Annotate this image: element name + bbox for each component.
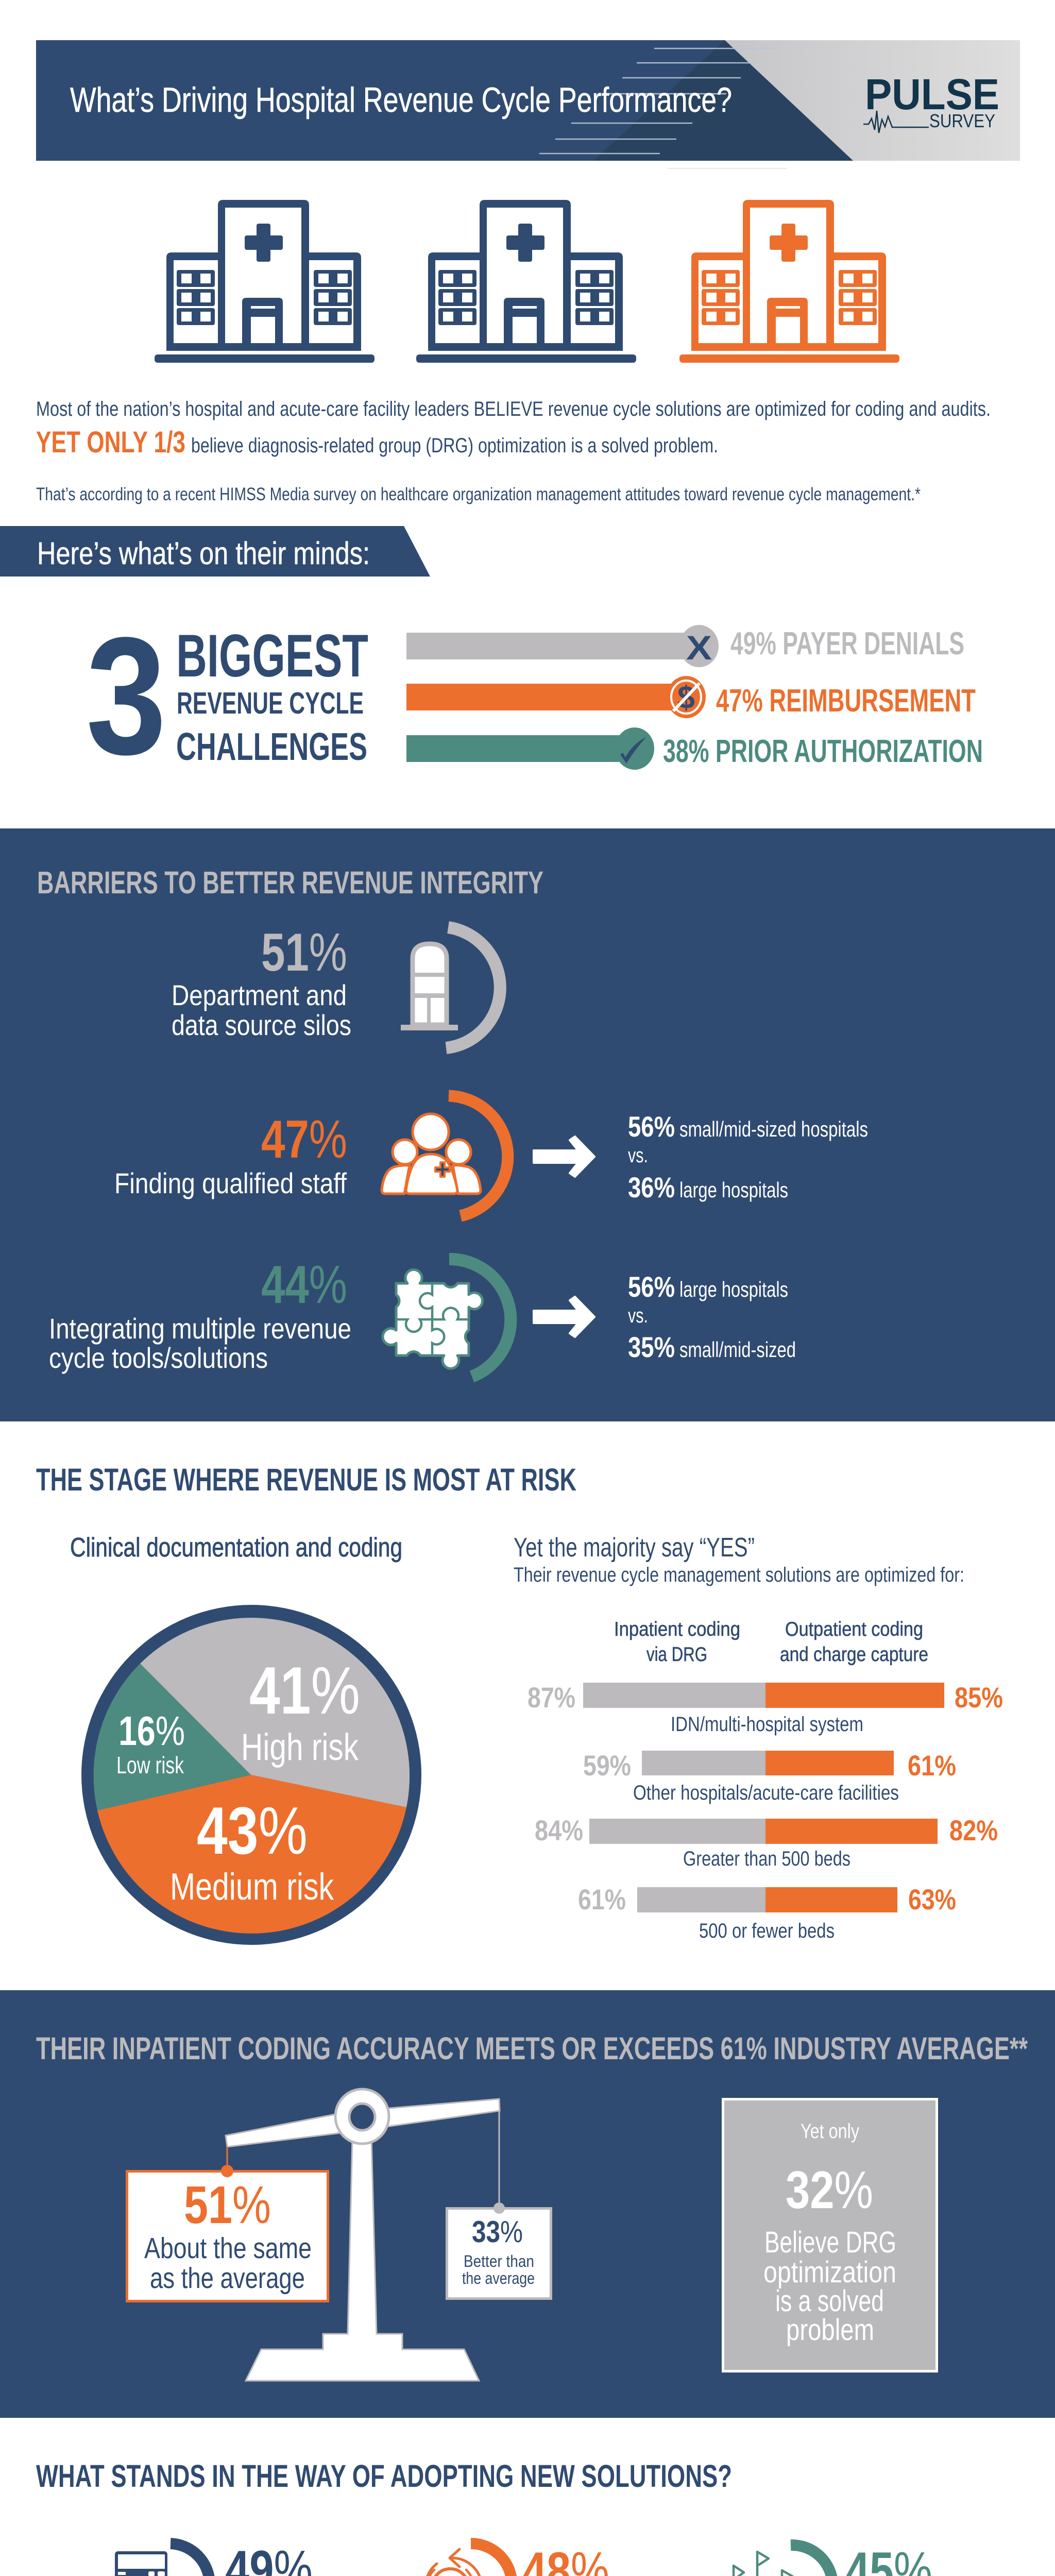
comparison: integrating: small/mid-sized xyxy=(679,1337,796,1362)
icon: podium with flags xyxy=(721,2552,794,2576)
bar: payer denials xyxy=(406,625,964,667)
row: greater than 500 beds: 84% xyxy=(535,1814,583,1846)
icon: hospital orange xyxy=(679,200,899,363)
comparison: integrating: 56% xyxy=(628,1270,675,1303)
callout: 33 percent better than: the average xyxy=(462,2269,535,2287)
icon: hospital navy 1 xyxy=(155,200,375,363)
pulse survey logo: PULSE xyxy=(865,70,999,118)
comparison: integrating: large hospitals xyxy=(679,1277,788,1301)
pie chart: risk: Medium risk xyxy=(170,1866,334,1908)
bar: payer denials: 49% PAYER DENIALS xyxy=(730,626,964,662)
intro text block: YET ONLY 1/3 xyxy=(36,426,185,459)
column headers: Inpatient coding xyxy=(614,1618,740,1640)
panel: 3 biggest challenges heading: REVENUE CYCLE xyxy=(177,686,364,720)
row: other hospitals: 59% xyxy=(583,1749,631,1782)
callout: yet only 32 percent xyxy=(723,2099,937,2371)
row: other hospitals: 61% xyxy=(908,1749,956,1782)
stat: proving return on investment xyxy=(426,2541,675,2576)
bar: reimbursement: $ xyxy=(677,680,695,716)
arrow: integrating xyxy=(534,1297,594,1337)
text block: yet the majority say yes: Their revenue cycle management solutions are optimized for: xyxy=(514,1564,964,1586)
callout: 51 percent about the same: About the same xyxy=(144,2232,312,2265)
comparison: integrating: 35% xyxy=(628,1331,675,1363)
comparison: staff: 56% xyxy=(628,1110,675,1143)
stat: 51 percent silos xyxy=(172,923,351,1041)
row: 500 or fewer beds xyxy=(578,1883,956,1942)
pulse survey logo: SURVEY xyxy=(929,110,995,131)
stat: 51 percent silos: data source silos xyxy=(172,1009,351,1041)
stat: 44 percent integrating xyxy=(49,1255,351,1374)
icon: staff group with arc xyxy=(382,1096,508,1216)
callout: 33 percent better than: 33% xyxy=(472,2215,523,2249)
comparison: integrating xyxy=(628,1270,796,1363)
row: greater than 500 beds: Greater than 500 beds xyxy=(683,1848,850,1870)
stat: competing projects xyxy=(721,2541,961,2576)
row: greater than 500 beds: 82% xyxy=(949,1814,998,1846)
row: other hospitals xyxy=(583,1749,956,1804)
callout: 51 percent about the same: 51% xyxy=(184,2175,271,2234)
panel: 3 biggest challenges heading: BIGGEST xyxy=(176,622,368,689)
chart: optimized for by facility xyxy=(528,1618,1003,1942)
text block: yet the majority say yes: Yet the majority say “YES” xyxy=(514,1533,755,1563)
comparison: staff: vs. xyxy=(628,1144,648,1167)
icon: calculator xyxy=(115,2551,167,2576)
bar: prior authorization xyxy=(406,727,983,770)
callout: 33 percent better than xyxy=(447,2111,551,2299)
row: IDN: IDN/multi-hospital system xyxy=(671,1713,863,1736)
heading: what stands in the way: WHAT STANDS IN THE WAY OF ADOPTING NEW SOLUTIONS? xyxy=(36,2459,732,2494)
column headers: via DRG xyxy=(646,1643,707,1666)
row: IDN: 85% xyxy=(955,1681,1003,1714)
row: IDN xyxy=(528,1681,1003,1736)
panel: 3 biggest challenges heading: CHALLENGES xyxy=(176,725,367,768)
comparison: staff xyxy=(628,1110,868,1204)
stat: 51 percent silos: Department and xyxy=(172,979,347,1011)
icon: money cycle xyxy=(426,2549,482,2576)
row: 500 or fewer beds: 500 or fewer beds xyxy=(699,1920,835,1942)
arrow: staff xyxy=(534,1137,594,1177)
callout: 33 percent better than: Better than xyxy=(464,2252,534,2270)
pie chart: risk xyxy=(81,1605,421,1945)
column headers xyxy=(614,1618,928,1666)
heading: barriers: BARRIERS TO BETTER REVENUE INTEGRITY xyxy=(37,865,543,900)
comparison: integrating: vs. xyxy=(628,1304,648,1327)
row: other hospitals: Other hospitals/acute-care facilities xyxy=(633,1782,899,1804)
callout: yet only 32 percent: optimization xyxy=(763,2256,896,2289)
comparison: staff: 36% xyxy=(628,1171,675,1204)
pie chart: risk: 43% xyxy=(197,1793,308,1868)
callout: yet only 32 percent: Yet only xyxy=(801,2120,859,2143)
subheading: clinical documentation: Clinical documentation and coding xyxy=(70,1533,402,1563)
stat: budget xyxy=(115,2540,313,2576)
callout: yet only 32 percent: 32% xyxy=(786,2160,873,2219)
callout: 51 percent about the same xyxy=(127,2147,328,2301)
stat: 47 percent staff: Finding qualified staff xyxy=(114,1167,347,1199)
banner: here's what's on their minds xyxy=(0,526,430,577)
row: 500 or fewer beds: 63% xyxy=(908,1883,956,1916)
panel: 3 biggest challenges heading xyxy=(86,602,368,789)
stat: 51 percent silos: 51% xyxy=(261,923,347,982)
stat: 44 percent integrating: 44% xyxy=(261,1255,347,1315)
pie chart: risk: 16% xyxy=(118,1708,185,1754)
row: greater than 500 beds xyxy=(535,1814,998,1870)
column headers: and charge capture xyxy=(780,1643,928,1666)
callout: yet only 32 percent: problem xyxy=(786,2313,874,2347)
callout: yet only 32 percent: is a solved xyxy=(775,2284,884,2318)
stat: 44 percent integrating: Integrating multiple revenue xyxy=(49,1312,351,1345)
text block: yet the majority say yes xyxy=(514,1533,964,1586)
callout: 51 percent about the same: as the average xyxy=(150,2262,305,2295)
icon: hospital navy 2 xyxy=(416,200,636,363)
stat: 44 percent integrating: cycle tools/solutions xyxy=(49,1342,268,1374)
pie chart: risk: Low risk xyxy=(116,1752,184,1778)
callout: yet only 32 percent: Believe DRG xyxy=(764,2226,896,2259)
title: What’s Driving Hospital Revenue Cycle Performance? xyxy=(70,80,732,120)
comparison: staff: large hospitals xyxy=(679,1178,788,1202)
row: IDN: 87% xyxy=(528,1681,575,1714)
stat: 47 percent staff: 47% xyxy=(261,1110,347,1170)
pie chart: risk: High risk xyxy=(241,1726,359,1768)
comparison: staff: small/mid-sized hospitals xyxy=(679,1117,868,1141)
stat: 47 percent staff xyxy=(114,1110,347,1199)
banner: here's what's on their minds: Here’s what’s on their minds: xyxy=(37,536,370,571)
bar: reimbursement xyxy=(406,676,976,719)
icon: balance scale xyxy=(226,2089,500,2381)
pie chart: risk: 41% xyxy=(249,1653,360,1728)
intro text block: believe diagnosis-related group (DRG) optimization is a solved problem. xyxy=(191,434,718,457)
icon: silo door with arc xyxy=(401,927,500,1048)
panel: 3 biggest challenges heading: 3 xyxy=(86,602,166,789)
row: 500 or fewer beds: 61% xyxy=(578,1883,626,1916)
header banner xyxy=(36,40,1020,168)
heading: stage where revenue is most at risk: THE STAGE WHERE REVENUE IS MOST AT RISK xyxy=(36,1462,576,1497)
icon: puzzle with arc xyxy=(383,1259,511,1377)
intro text block xyxy=(36,398,991,504)
bar: payer denials: X xyxy=(686,629,712,667)
panel: barriers xyxy=(0,828,1055,1421)
column headers: Outpatient coding xyxy=(785,1618,923,1640)
panel: inpatient coding accuracy xyxy=(0,1990,1055,2418)
